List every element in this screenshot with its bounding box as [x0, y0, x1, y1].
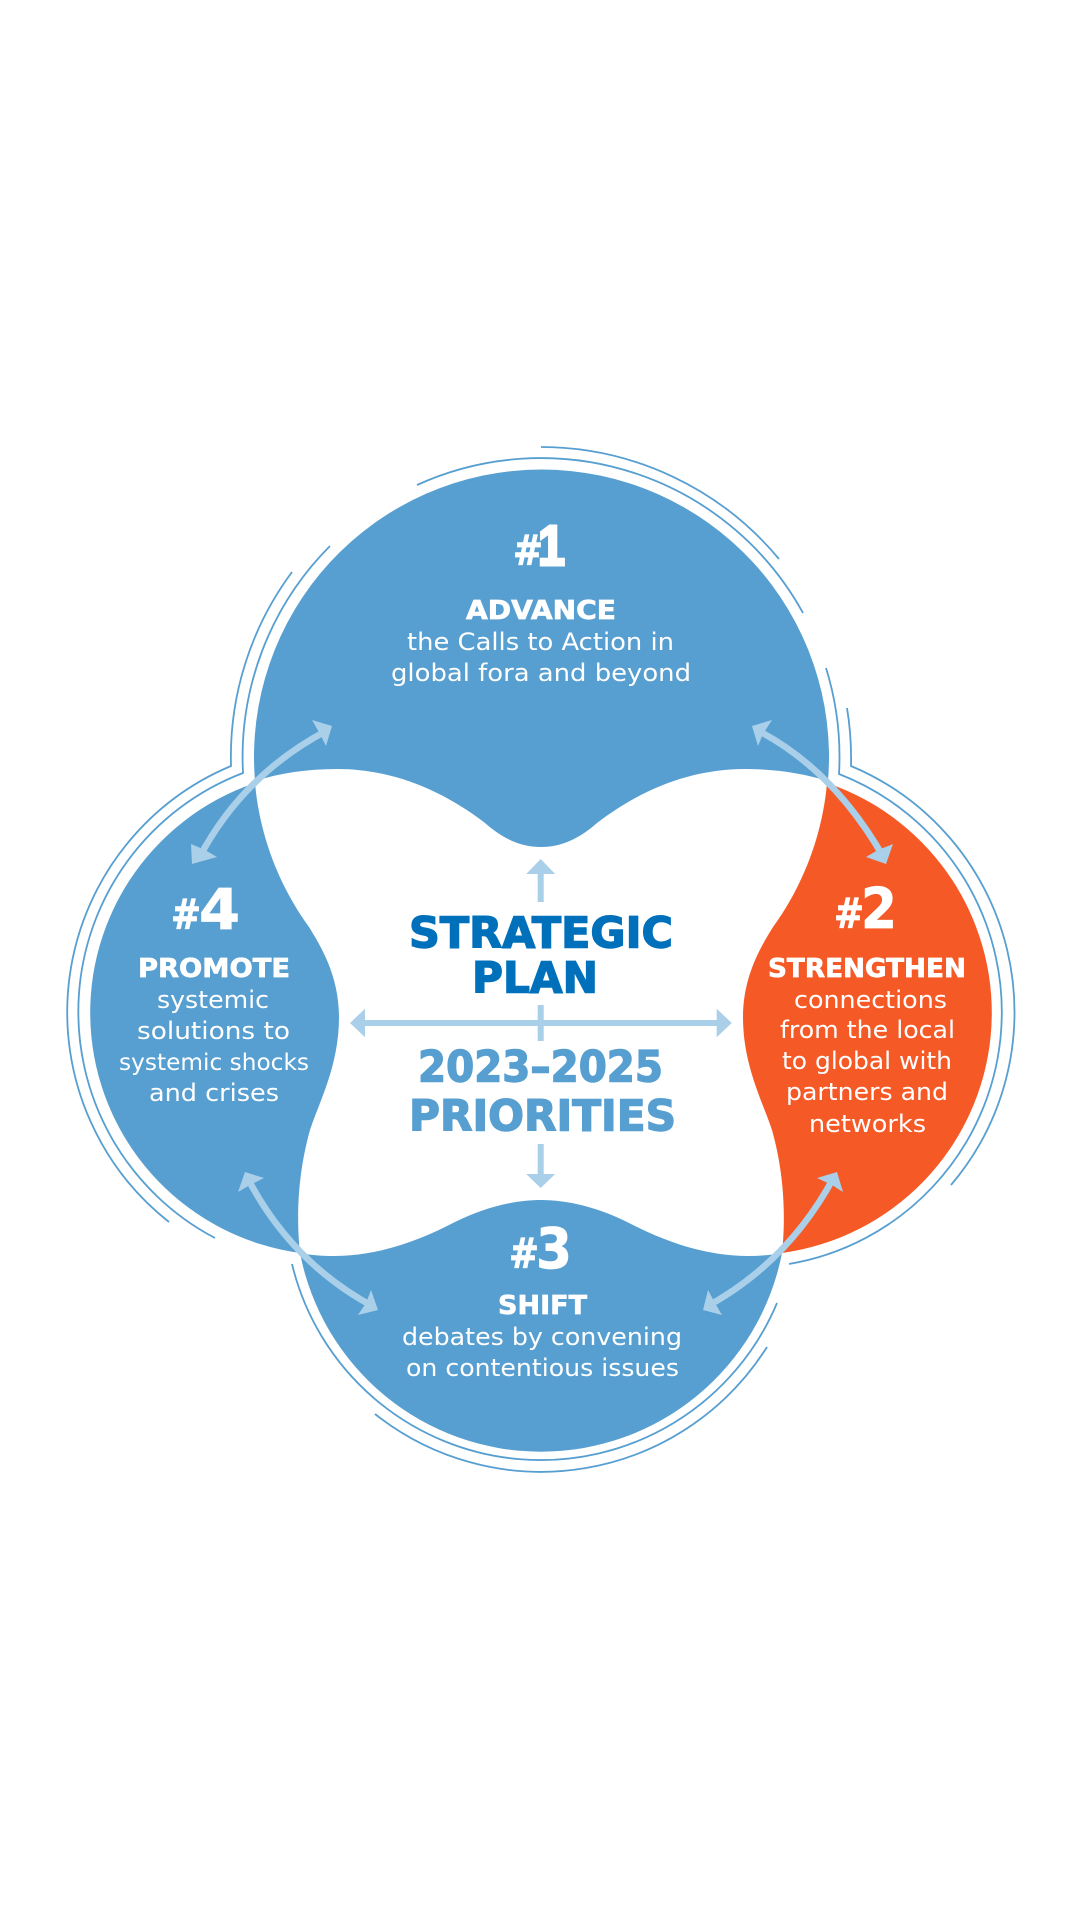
panel: priority 1 advance	[254, 470, 829, 847]
description: on contentious issues	[406, 1354, 679, 1382]
description: networks	[809, 1110, 926, 1138]
panel: priority 2 strengthen	[743, 783, 992, 1253]
number: #3: #	[509, 1229, 539, 1278]
description: and crises	[149, 1079, 279, 1107]
digit: 1: 1	[538, 514, 565, 578]
digit: 3: 3	[536, 1217, 572, 1282]
number: #4: #	[171, 890, 201, 939]
description: connections	[794, 986, 947, 1014]
arrow: between 1 and 4	[191, 720, 332, 864]
description: solutions to	[137, 1017, 290, 1045]
number: #2: #	[834, 889, 864, 938]
arrow: between 1 and 2	[752, 720, 893, 864]
panel: priority 3 shift	[300, 1200, 782, 1452]
description: systemic	[157, 986, 269, 1014]
digit: 2: 2	[861, 877, 897, 942]
heading: ADVANCE: ADVANCE	[466, 596, 616, 626]
subtitle: 2023–2025 priorities: 2023–2025	[418, 1042, 663, 1092]
description: the Calls to Action in	[407, 628, 674, 656]
heading: STRENGTHEN: STRENGTHEN	[768, 954, 966, 984]
description: partners and	[786, 1078, 948, 1106]
heading: PROMOTE: PROMOTE	[138, 954, 290, 984]
arrow: between 2 and 3	[703, 1172, 843, 1315]
digit: 4: 4	[199, 878, 240, 943]
number: #1: #	[513, 526, 543, 575]
panel: priority 4 promote	[90, 783, 339, 1253]
description	[402, 1323, 682, 1382]
subtitle: 2023–2025 priorities	[409, 1042, 676, 1142]
subtitle: 2023–2025 priorities: PRIORITIES	[409, 1092, 676, 1142]
title: strategic plan: PLAN	[472, 954, 598, 1004]
arrow: centre cross	[350, 859, 732, 1188]
heading: SHIFT: SHIFT	[498, 1291, 587, 1321]
description: global fora and beyond	[391, 659, 691, 687]
description: systemic shocks	[119, 1050, 309, 1076]
description	[119, 986, 309, 1107]
outer ring lines	[67, 447, 1015, 1472]
description: from the local	[780, 1016, 955, 1044]
title: strategic plan: STRATEGIC	[409, 908, 673, 958]
title: strategic plan	[409, 908, 673, 1004]
arrow: between 4 and 3	[238, 1172, 378, 1315]
description: to global with	[782, 1047, 952, 1075]
description	[780, 986, 955, 1138]
description: debates by convening	[402, 1323, 682, 1351]
description	[391, 628, 691, 687]
